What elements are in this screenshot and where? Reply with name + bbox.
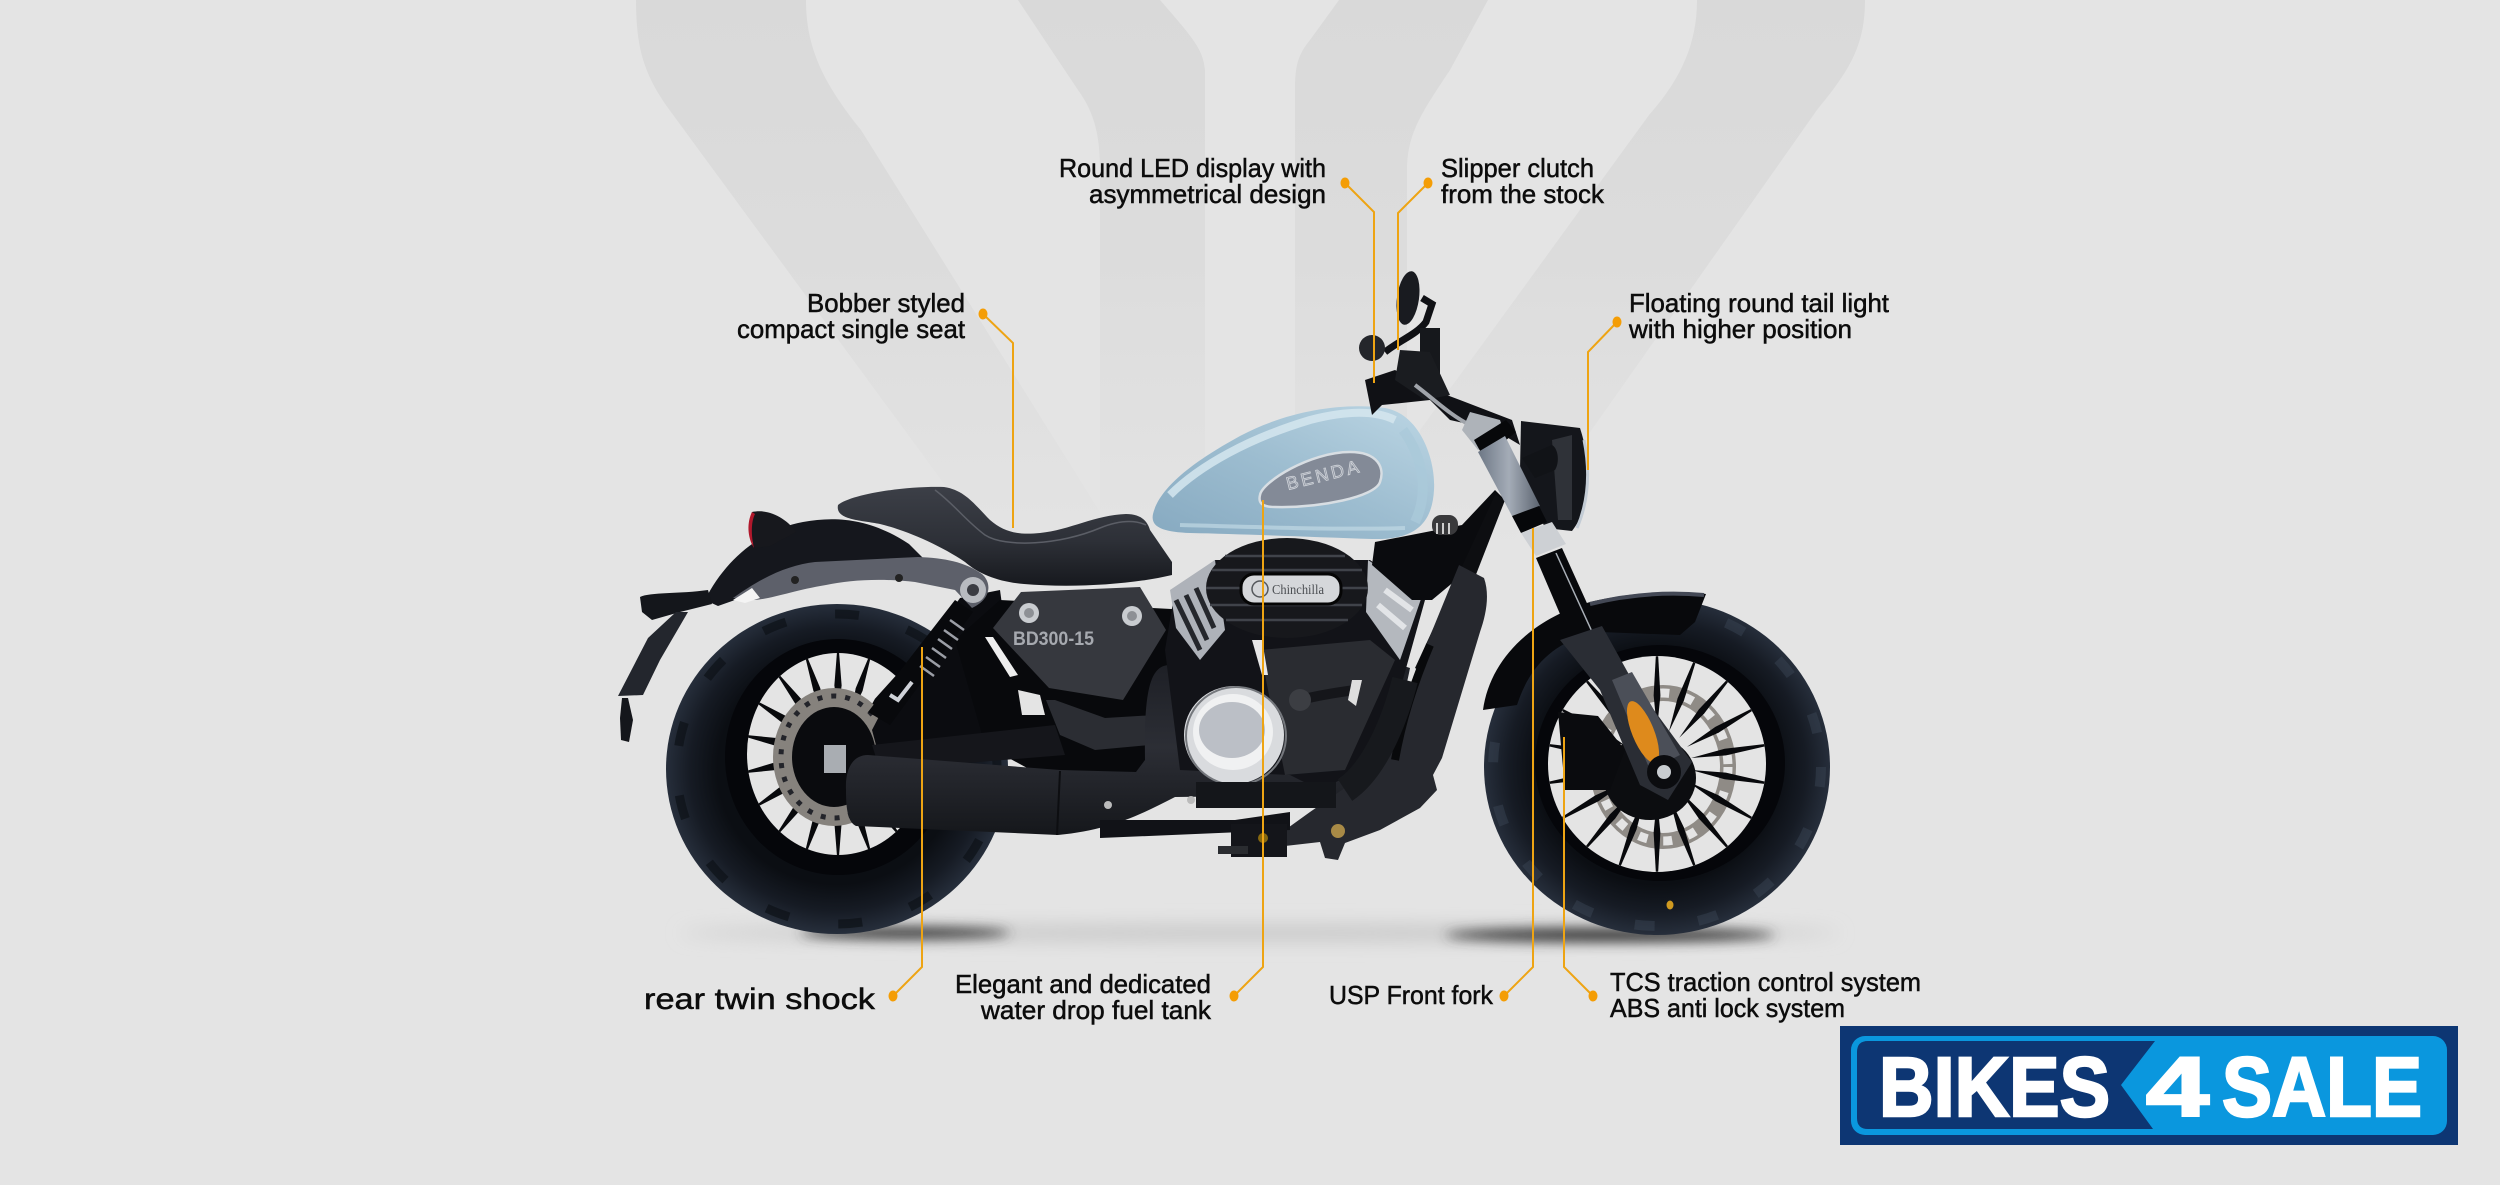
rear fender [705, 519, 988, 608]
headlight [1520, 421, 1588, 531]
logo: Bikes 4 Sale [1840, 1026, 2458, 1145]
callout: slipper clutch [1398, 153, 1605, 350]
seat [838, 487, 1172, 586]
engine clutch cover [1184, 686, 1286, 785]
rear turn signal and licence plate holder [618, 590, 712, 742]
foot peg [1218, 824, 1345, 857]
tail light [748, 511, 796, 548]
tank badge [1260, 452, 1381, 507]
exhaust [846, 660, 1410, 835]
front fender [1483, 592, 1706, 710]
callout: slipper clutch: Slipper clutch [1441, 153, 1594, 183]
callout: tail light [1588, 288, 1890, 470]
fuel cap detail [1432, 515, 1458, 535]
front fork [1474, 420, 1692, 800]
callout: LED display: Round LED display with [1059, 153, 1326, 183]
fuel tank [1153, 406, 1434, 539]
callout: bobber seat [737, 288, 1013, 528]
callout: rear twin shock [644, 647, 922, 1016]
callout: LED display: asymmetrical design [1089, 179, 1326, 209]
callout: rear twin shock: rear twin shock [644, 983, 876, 1016]
callout: fuel tank: water drop fuel tank [980, 995, 1212, 1025]
logo: Bikes 4 Sale: BIKES [1879, 1040, 2110, 1134]
callout: LED display [1059, 153, 1374, 383]
handlebar and controls [1359, 270, 1520, 450]
callout: slipper clutch: from the stock [1441, 179, 1605, 209]
callout: TCS and ABS [1564, 737, 1921, 1023]
callout: front fork: USP Front fork [1329, 980, 1494, 1010]
engine block [1165, 560, 1425, 790]
callout: TCS and ABS: TCS traction control system [1610, 967, 1921, 997]
callout: tail light: with higher position [1628, 314, 1852, 344]
front tyre valve mark [1666, 900, 1674, 910]
logo: Bikes 4 Sale: SALE [2222, 1040, 2422, 1134]
air filter cover with Chinchilla badge: Chinchilla [1272, 583, 1325, 598]
callout: front fork [1329, 528, 1533, 1010]
frame and exhaust downtube [1100, 490, 1505, 860]
air filter cover with Chinchilla badge [1206, 538, 1368, 638]
callout: bobber seat: Bobber styled [807, 288, 965, 318]
side panel with model number: BD300-15 [1013, 629, 1094, 650]
rear twin shock [868, 600, 973, 725]
callout: bobber seat: compact single seat [737, 314, 966, 344]
callout: fuel tank [955, 500, 1263, 1025]
callout: TCS and ABS: ABS anti lock system [1610, 993, 1845, 1023]
callout: fuel tank: Elegant and dedicated [955, 969, 1211, 999]
motorcycle [618, 270, 1830, 935]
ground shadow [680, 925, 1840, 942]
tank badge: BENDA [1284, 457, 1361, 494]
swing arm and dark rear mass [872, 590, 1200, 780]
rear wheel [666, 604, 1008, 934]
front wheel [1484, 599, 1830, 935]
side panel with model number [993, 587, 1166, 700]
watermark: large brand logo shape [636, 0, 1865, 560]
callout: tail light: Floating round tail light [1629, 288, 1890, 318]
logo: Bikes 4 Sale: 4 [2146, 1040, 2209, 1134]
